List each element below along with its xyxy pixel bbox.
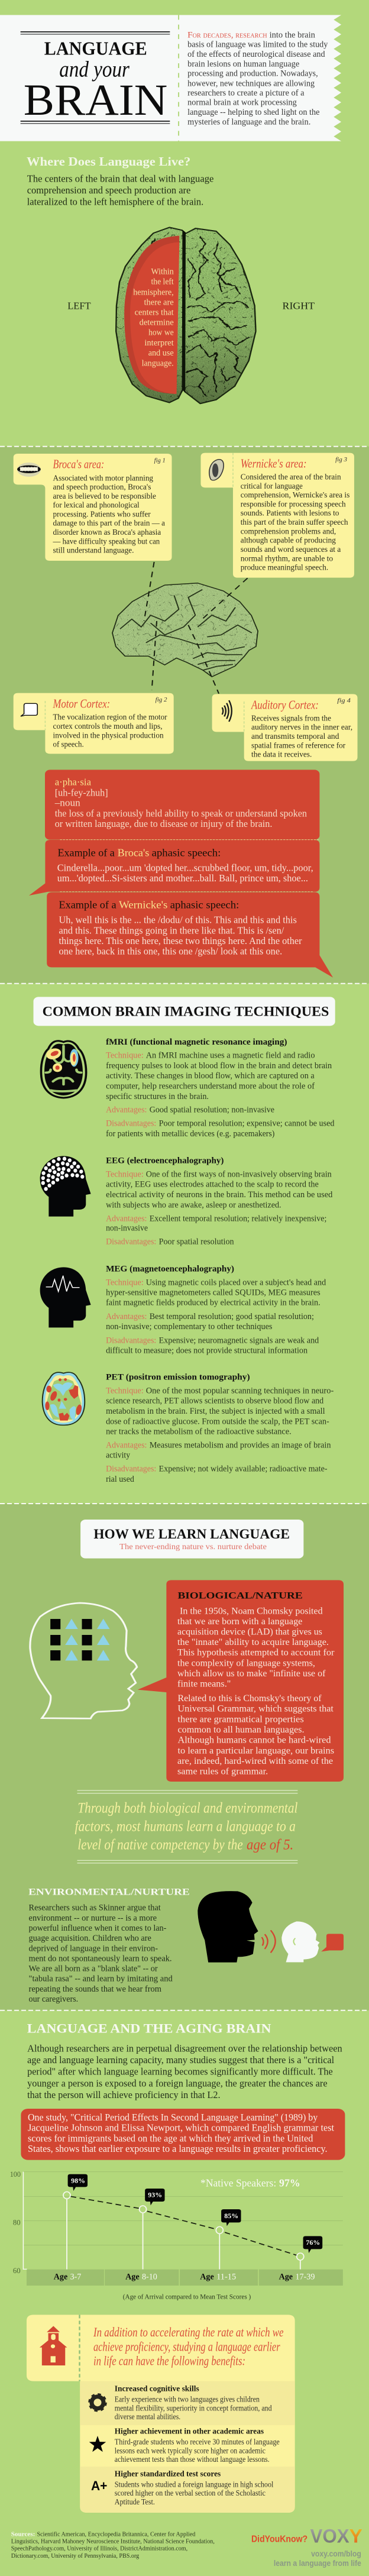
brain side view with dashed pointers (111, 562, 261, 694)
panel: motor cortex (14, 693, 174, 754)
body text: Disadvantages: (106, 1336, 156, 1345)
body text (106, 1051, 335, 1139)
benefit: higher academic achievement: Third-grade students who receive 30 minutes of language (115, 2438, 280, 2446)
benefit: increased cognitive skills: Increased cognitive skills (115, 2385, 199, 2393)
body text: Expensive; not widely available; radioactive mate- (159, 1465, 328, 1473)
body text: produce meaningful speech. (241, 564, 328, 572)
body text: One of the first ways of non-invasively observing brain (146, 1170, 332, 1179)
age category bars: 8-10 (142, 2273, 157, 2281)
text: within the left hemisphere: hemisphere, (133, 287, 174, 297)
speech bubble: Wernicke's example: Example of a (59, 899, 116, 911)
panel: aphasia definition: –noun (54, 797, 80, 808)
benefit: higher test scores: Students who studied a foreign language in high school (115, 2480, 273, 2489)
panel: Broca's area: fig 1 (154, 457, 166, 464)
chart: mean test score by age of arrival (10, 2171, 343, 2300)
speech bubble: Broca's example: Example of a (58, 847, 115, 859)
text: within the left hemisphere: there are (144, 297, 174, 307)
body text: repeating the sounds that we hear from (29, 1984, 161, 1994)
title: BRAIN (24, 76, 167, 124)
speech bubble: Broca's example: Cinderella...poor...um 'dopted her...scrubbed floor, um, tidy...poor, (57, 862, 313, 873)
body text: that we are born with a language (177, 1615, 303, 1627)
body text: our caregivers. (29, 1995, 78, 2004)
body text: Disadvantages: (106, 1465, 156, 1473)
body text: Advantages: (106, 1214, 147, 1223)
trend line (70, 2196, 296, 2255)
body text: are, indeed, hard-wired with some of the (177, 1755, 333, 1766)
body text: for patients with metallic devices (e.g. pacemakers) (106, 1129, 274, 1139)
brain top view with left hemisphere highlighted (67, 225, 315, 406)
text: within the left hemisphere: determine (140, 317, 174, 327)
body text (106, 1278, 326, 1355)
body text: One of the most popular scanning techniques in neuro- (146, 1386, 334, 1395)
body text: common to all human languages. (177, 1724, 305, 1735)
y axis: 80 (13, 2219, 21, 2227)
body text: Researchers such as Skinner argue that (29, 1903, 161, 1912)
age category bars: 17-39 (295, 2273, 315, 2281)
callout: critical period study (21, 2109, 345, 2160)
age category bars: 11-15 (216, 2273, 236, 2281)
icon: gear (90, 2394, 105, 2410)
heading box: how we learn language: HOW WE LEARN LANGUAGE (93, 1526, 290, 1541)
intro text: For decades, research (187, 31, 267, 40)
logo: DidYouKnow VOXY (251, 2526, 362, 2568)
logo: DidYouKnow VOXY: VOX (310, 2526, 349, 2547)
sources: Scientific American, Encyclopedia Britannica, Center for Applied (37, 2530, 195, 2538)
sources: Dictionary.com, University of Pennsylvania, PBS.org (11, 2552, 139, 2559)
speech bubble: Broca's example: aphasic speech: (152, 847, 221, 859)
body text (27, 2043, 342, 2101)
text: within the left hemisphere: language. (142, 358, 174, 368)
icon: ear (209, 460, 224, 480)
body text: although capable of producing (241, 536, 336, 545)
body text: The vocalization region of the motor (53, 713, 167, 722)
brain illustration (113, 225, 259, 406)
benefit: higher academic achievement: achievement tests than those without language lessons. (115, 2455, 270, 2464)
text: within the left hemisphere: how we (148, 327, 174, 337)
icon: head with electrodes (40, 1156, 91, 1217)
body text: comprehension problems and, (241, 527, 336, 536)
logo: DidYouKnow VOXY: Y (349, 2526, 362, 2547)
sources: Linguistics, Harvard Mahoney Neuroscience Institute, National Science Foundation, (11, 2538, 215, 2545)
body text (177, 1605, 335, 1776)
native speakers note: *Native Speakers: (200, 2177, 276, 2189)
heading: Auditory Cortex: (251, 698, 319, 712)
body text (53, 474, 165, 555)
body text: Expensive; neuromagnetic signals are weak and (159, 1336, 319, 1345)
body text: ner tracks the metabolism of the radioactive substance. (106, 1427, 292, 1436)
speech bubble: Wernicke's example: Uh, well this is the ... the /dodu/ of this. This and this and this (59, 914, 297, 925)
text: within the left hemisphere: the left (151, 276, 174, 286)
body text (106, 1386, 334, 1484)
heading: ENVIRONMENTAL/NURTURE (28, 1887, 190, 1897)
panel: aphasia definition (45, 770, 319, 840)
body text: and speech production, Broca's (53, 483, 151, 492)
intro text: however, new techniques are allowing (187, 79, 315, 88)
text: within the left hemisphere: and use (148, 347, 174, 358)
age category bars (27, 2270, 343, 2286)
body text (29, 1903, 173, 2004)
text: language centers intro: comprehension and speech production are (27, 185, 190, 196)
panel: benefits of early language study (27, 2315, 295, 2513)
body text: Poor spatial resolution (159, 1237, 234, 1246)
speech bubble: Wernicke's example: Wernicke's (119, 899, 167, 911)
intro text: researchers to create a picture of a (187, 89, 305, 98)
icon: star (89, 2436, 106, 2452)
dark green section: how we learn (0, 1504, 369, 2011)
body text: for lexical and phonological (53, 501, 140, 510)
text: benefits introduction: in life can have the following benefits: (93, 2354, 245, 2368)
heading box: common brain imaging techniques: COMMON BRAIN IMAGING TECHNIQUES (43, 1004, 329, 1019)
body text: guage acquisition. Children who are (29, 1934, 151, 1943)
value callouts: 85% (224, 2212, 238, 2220)
dark green section: brain areas (0, 447, 369, 984)
sources (11, 2530, 215, 2559)
title: and your (59, 57, 130, 82)
heading: Broca's area: (53, 458, 104, 471)
grid lines (24, 2172, 343, 2245)
body text: critical for language (241, 482, 303, 491)
heading: PET (positron emission tomography) (106, 1373, 250, 1382)
chart caption: (Age of Arrival compared to Mean Test Scores ) (123, 2293, 251, 2300)
body text: rial used (106, 1475, 134, 1484)
heading: Wernicke's area: (241, 457, 307, 470)
body text: the complexity of language systems, (177, 1657, 315, 1668)
body text: the "innate" ability to acquire language. (177, 1636, 329, 1647)
sources: Sources: (11, 2530, 35, 2538)
icon: head outline with blocks (30, 1603, 137, 1718)
panel: aphasia definition: the loss of a previously held ability to speak or understand spoken (55, 808, 307, 819)
body text: difficult to measure; does not provide structural information (106, 1346, 308, 1355)
body text: with subjects who are awake, asleep or anesthetized. (106, 1201, 281, 1210)
body text: activity, EEG uses electrodes attached to the scalp to record the (106, 1180, 319, 1189)
intro text: into the brain (270, 31, 315, 40)
body text: and transmits temporal and (251, 732, 339, 741)
icon: A plus: A+ (91, 2479, 107, 2493)
body text (106, 1170, 332, 1246)
intro text (187, 31, 328, 127)
body text: still understand language. (53, 547, 134, 555)
panel: environmental / nurture (28, 1887, 190, 2004)
text: within the left hemisphere: centers that (135, 307, 174, 317)
panel: auditory cortex: fig 4 (337, 697, 351, 704)
body text: specific structures in the brain. (106, 1092, 209, 1101)
intro text: basis of language was limited to the study (187, 40, 328, 49)
body text: Associated with motor planning (53, 474, 154, 483)
benefit: increased cognitive skills: diverse mental abilities. (115, 2413, 180, 2422)
body text: We are all born as a "blank slate" -- or (29, 1964, 158, 1973)
body text: that the person will achieve proficiency in that L2. (27, 2089, 220, 2101)
body text (241, 473, 350, 572)
body text (53, 713, 167, 749)
body text: Best temporal resolution; good spatial resolution; (150, 1312, 314, 1321)
body text: of speech. (53, 741, 84, 749)
text: within the left hemisphere (133, 266, 174, 368)
speech bubble: Wernicke's example: and this. These things going in there like that. This is /sen/ (59, 925, 284, 936)
icon: fMRI scan (41, 1041, 86, 1098)
body text: cortex controls the mouth and lips, (53, 722, 163, 731)
body text: this part of the brain suffer speech (241, 518, 348, 527)
benefit: higher test scores: scored higher on the verbal section of the Scholastic (115, 2489, 266, 2498)
body text: non-invasive (106, 1224, 148, 1233)
panel: aphasia definition and speech examples (29, 770, 333, 978)
icon: adult speaking to child (198, 1891, 344, 1963)
panel: MEG (40, 1265, 326, 1355)
body text: Technique: (106, 1170, 144, 1179)
panel: PET (43, 1372, 334, 1484)
panel: aphasia definition: [uh-fey-zhuh] (55, 787, 108, 798)
body text: Good spatial resolution; non-invasive (150, 1106, 274, 1114)
text: language centers intro (27, 173, 213, 207)
heading: BIOLOGICAL/NATURE (177, 1591, 303, 1601)
body text: Technique: (106, 1386, 144, 1395)
value callouts: 98% (71, 2176, 85, 2184)
body text: involved in the physical production (53, 731, 164, 740)
text: within the left hemisphere: Within (151, 266, 174, 276)
benefit: increased cognitive skills (115, 2385, 272, 2422)
heading box: how we learn language: The never-ending nature vs. nurture debate (119, 1542, 267, 1552)
intro text: processing and production. Nowadays, (187, 69, 318, 78)
icon: sound waves (222, 700, 232, 722)
heading: Motor Cortex: (53, 697, 110, 710)
body text: comprehension, Wernicke's area is (241, 491, 350, 500)
body text: same rules of grammar. (177, 1766, 268, 1776)
body text: finite means." (177, 1678, 231, 1689)
banner ticket shape (0, 15, 341, 141)
icon: schoolhouse (40, 2326, 67, 2365)
panel: Broca's area (14, 454, 172, 561)
icon: mouth (17, 463, 41, 477)
intro text: mysteries of language and the brain. (187, 118, 310, 127)
speech bubble: Broca's example: um...'dopted...Si-sisters and mother...ball. Ball, prince um, shoe... (57, 872, 308, 884)
speech bubble: Broca's example: Broca's (118, 847, 149, 859)
speech bubble: Wernicke's example: one here, back in this one, this one /gesh/ look at this one. (59, 946, 282, 956)
body text: damage to this part of the brain — a (53, 519, 165, 528)
red overlay on left hemisphere (124, 235, 179, 394)
heading: language and the aging brain (27, 2022, 342, 2101)
body text: Technique: (106, 1051, 144, 1060)
benefit row backgrounds (80, 2381, 295, 2425)
icon: head with brain wave (40, 1267, 91, 1327)
body text (251, 714, 352, 759)
body text: Disadvantages: (106, 1119, 156, 1128)
heading: MEG (magnetoencephalography) (106, 1265, 234, 1274)
body text: responsible for processing speech (241, 500, 346, 509)
speech bubble: Broca's example (29, 840, 319, 896)
callout: age of five quote: level of native competency by the (77, 1837, 243, 1853)
y axis: 60 (13, 2267, 21, 2276)
age category bars: Age (200, 2273, 214, 2281)
body text: sounds and word sequences at a (241, 545, 341, 554)
callout: age of five quote: age of 5. (247, 1837, 293, 1853)
panel: title banner (0, 15, 341, 141)
body text: An fMRI machine uses a magnetic field and radio (146, 1051, 315, 1060)
body text: sounds. Patients with lesions to (241, 509, 339, 518)
body text: disorder known as Broca's aphasia (53, 528, 161, 537)
native speakers note: 97% (279, 2177, 300, 2189)
heading: language and the aging brain: LANGUAGE AND THE AGING BRAIN (27, 2022, 271, 2036)
benefit: increased cognitive skills: Early experience with two languages gives children (115, 2396, 260, 2404)
heading box: common brain imaging techniques (34, 997, 335, 1026)
intro text: normal brain at work processing (187, 98, 297, 107)
body text: ment do not spontaneously learn to speak. (29, 1954, 172, 1963)
benefit: increased cognitive skills: mental flexibility, superiority in concept formation, and (115, 2404, 272, 2413)
benefit: higher test scores: Higher standardized test scores (115, 2470, 221, 2478)
y axis: 100 (10, 2171, 21, 2179)
intro text: language -- helping to shed light on the (187, 108, 319, 117)
panel: fMRI (41, 1037, 335, 1139)
value callouts: 93% (148, 2190, 162, 2199)
body text: Considered the area of the brain (241, 473, 341, 481)
pointer lines (144, 562, 248, 694)
benefit: higher test scores (91, 2470, 273, 2507)
body text: there are grammatical properties (177, 1714, 304, 1724)
body text: Using magnetic coils placed over a subject's head and (146, 1278, 326, 1287)
body text: Universal Grammar, which suggests that (177, 1703, 334, 1714)
speech bubble: Wernicke's example: aphasic speech: (170, 899, 239, 911)
body text: powerful influence when it comes to lan- (29, 1924, 166, 1933)
callout: age of five quote (75, 1790, 298, 1863)
title (21, 31, 170, 124)
body text: In the 1950s, Noam Chomsky posited (180, 1605, 323, 1616)
text: benefits introduction (93, 2325, 284, 2368)
body text: Although humans cannot be hard-wired (177, 1734, 331, 1745)
body text: spatial frames of reference for (251, 741, 345, 750)
intro text: brain lesions on human language (187, 60, 299, 69)
body text: hyper-sensitive magnetometers called SQUIDs, MEG measures (106, 1288, 321, 1297)
body text: area is believed to be responsible (53, 492, 156, 501)
benefit: higher academic achievement: lessons each week typically score higher on academic (115, 2446, 266, 2455)
panel: auditory cortex (212, 694, 358, 761)
text: language centers intro: lateralized to the left hemisphere of the brain. (27, 196, 203, 207)
speech bubble: Wernicke's example (47, 892, 333, 978)
body text: which allow us to make "infinite use of (177, 1667, 325, 1679)
body text: — have difficulty speaking but can (53, 537, 160, 546)
body text: the data it receives. (251, 751, 312, 759)
benefit: higher test scores: Aptitude Test. (115, 2498, 155, 2507)
body text: computer, help researchers understand more about the role of (106, 1082, 315, 1091)
age category bars: Age (125, 2273, 140, 2281)
benefit: higher academic achievement: Higher achievement in other academic areas (115, 2428, 264, 2436)
intro text: of the effects of neurological disease and (187, 50, 325, 59)
body text: auditory nerves in the inner ear, (251, 723, 352, 732)
body text: processing. Patients who suffer (53, 510, 151, 519)
body text: "tabula rasa" -- and learn by imitating and (29, 1974, 173, 1983)
panel: aphasia definition: or written language, due to disease or injury of the brain. (55, 818, 272, 829)
body text: faint magnetic fields produced by electrical activity in the brain. (106, 1298, 321, 1307)
y axis (10, 2171, 27, 2276)
heading: fMRI (functional magnetic resonance imaging) (106, 1037, 287, 1047)
value callouts: 76% (306, 2238, 320, 2247)
body text: deprived of language in their environ- (29, 1944, 158, 1953)
body text: activity. These changes in blood flow, which are captured on a (106, 1071, 315, 1081)
heading: where does language live (27, 155, 213, 207)
panel: aphasia definition: a·pha·sia (55, 777, 91, 787)
body text: metabolism in the brain. First, the subject is injected with a small (106, 1407, 325, 1416)
panel: biological / nature (138, 1580, 344, 1782)
panel: Wernicke's area (200, 453, 354, 578)
body text: This hypothesis attempted to account for (177, 1647, 335, 1657)
body text: non-invasive; complementary to other techniques (106, 1322, 272, 1331)
age category bars: 3-7 (70, 2273, 81, 2281)
sources: SpeechPathology.com, University of Illinois, DistrictAdministration.com, (11, 2545, 187, 2552)
body text: environment -- or nurture -- is a more (29, 1914, 157, 1923)
icon: speech bubble (21, 703, 37, 716)
icon: PET scan (43, 1372, 85, 1425)
data stems and points (63, 2192, 304, 2270)
text: within the left hemisphere: interpret (144, 337, 174, 348)
body text: Technique: (106, 1278, 144, 1287)
speech bubble: Wernicke's example: things here. This one here, these two things here. And the other (59, 935, 302, 946)
tab and card background (27, 2315, 295, 2513)
body text: Advantages: (106, 1441, 147, 1450)
logo: DidYouKnow VOXY: DidYouKnow? (251, 2533, 308, 2544)
age category bars: Age (279, 2273, 293, 2281)
body text: acquisition device (LAD) that gives us (177, 1626, 322, 1637)
panel: Wernicke's area: fig 3 (335, 456, 347, 463)
body text: Related to this is Chomsky's theory of (177, 1692, 322, 1704)
body text: normal rhythm, are unable to (241, 554, 333, 563)
label: left: LEFT (67, 300, 91, 311)
body text: Measures metabolism and provides an image of brain (150, 1441, 331, 1450)
body text: to learn a particular language, our brains (177, 1745, 334, 1756)
benefit: higher academic achievement (115, 2428, 280, 2464)
callout: critical period study: scores for immigrants based on the age at which they arrived in the United (28, 2133, 313, 2144)
panel: motor cortex: fig 2 (156, 696, 167, 703)
value callouts (68, 2174, 322, 2253)
body text: Excellent temporal resolution; relatively inexpensive; (150, 1214, 326, 1223)
text: language centers intro: The centers of the brain that deal with language (27, 173, 213, 184)
body text: Advantages: (106, 1312, 147, 1321)
body text: Disadvantages: (106, 1237, 156, 1246)
heading: where does language live: Where Does Language Live? (27, 155, 190, 169)
panel: EEG (40, 1156, 332, 1246)
age category bars: Age (54, 2273, 67, 2281)
heading box: how we learn language (80, 1520, 303, 1559)
body text: Advantages: (106, 1106, 147, 1114)
heading: EEG (electroencephalography) (106, 1156, 224, 1165)
body text: Receives signals from the (251, 714, 331, 723)
body text: activity (106, 1451, 130, 1460)
title: LANGUAGE (44, 38, 147, 59)
label: right: RIGHT (283, 300, 315, 311)
